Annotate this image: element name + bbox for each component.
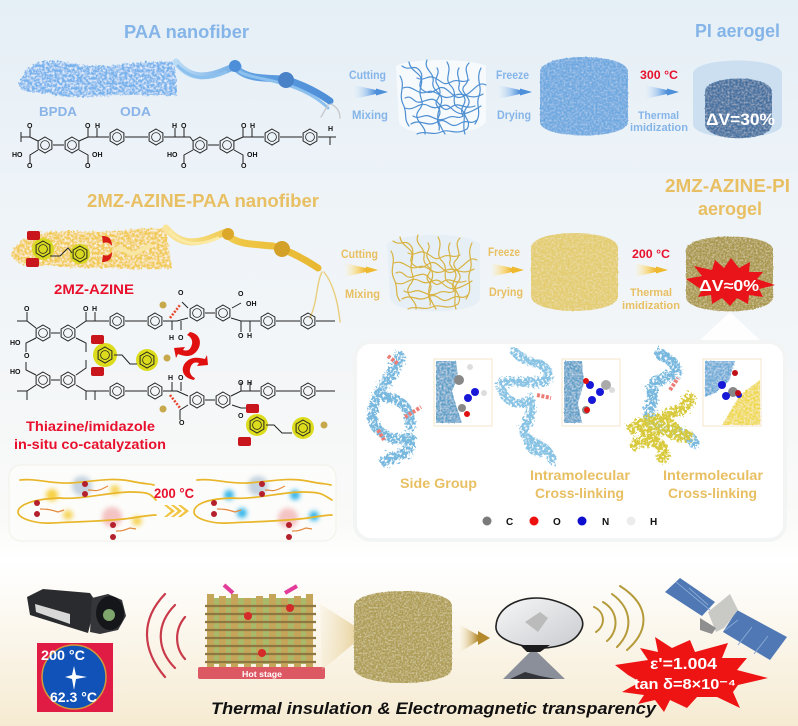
- icon: satellite: [665, 578, 787, 660]
- scaffold on hot stage: [198, 585, 325, 679]
- chemical structure: crosslinked chains: [10, 290, 335, 427]
- label: 200 C scheme: 200 °C: [154, 486, 194, 501]
- label: outside temperature: 200 °C: [41, 648, 85, 663]
- chemical structure: PAA: O: [241, 163, 247, 170]
- label: side group: Side Group: [400, 475, 477, 491]
- chemical structure: crosslinked chains: O: [83, 306, 89, 313]
- arrow: cutting gold: [344, 263, 378, 277]
- section: 2MZ-AZINE route: [10, 176, 790, 452]
- label: thermal imidization gold: [622, 287, 680, 312]
- callout: delta V 0: [686, 258, 775, 306]
- chemical structure: PAA: O: [85, 123, 91, 130]
- label: thiazine imidazole: [14, 418, 166, 452]
- highlight: callout beam to panel: [698, 312, 762, 342]
- chemical structure: crosslinked chains: O: [179, 420, 185, 427]
- cylinder: PI aerogel with shrinkage: [693, 60, 782, 138]
- cylinder: gold freeze-dried aerogel: [531, 233, 618, 311]
- process labels: freeze drying gold: [488, 247, 523, 299]
- process labels: freeze drying: Freeze: [496, 70, 529, 82]
- molecule: side group: [372, 356, 411, 462]
- chemical structure: PAA: O: [27, 123, 33, 130]
- label: thiazine imidazole: in-situ co-catalyzation: [14, 436, 166, 452]
- chemical structure: crosslinked chains: H: [247, 333, 252, 340]
- legend: atoms: H: [650, 517, 657, 528]
- heading: 2MZ-AZINE-PI aerogel: 2MZ-AZINE-PI: [665, 176, 790, 196]
- inset: side group: [434, 359, 492, 426]
- process labels: cutting mixing gold: Mixing: [345, 289, 380, 301]
- icon: red radiation arcs: [147, 594, 185, 677]
- cylinder: final aerogel: [354, 591, 452, 683]
- thermal image: [37, 643, 113, 712]
- fibers: after heating: [194, 479, 332, 523]
- chemical structure: PAA: H: [328, 126, 333, 133]
- fiber mat: gold: [11, 228, 172, 269]
- panel: catalysis scheme: [9, 465, 336, 541]
- process labels: cutting mixing: Mixing: [352, 110, 388, 122]
- heading: 2MZ-AZINE-PI aerogel: aerogel: [698, 199, 762, 219]
- label: thermal imidization: Thermal: [638, 110, 679, 122]
- chemical structure: PAA: O: [85, 163, 91, 170]
- chemical structure: crosslinked chains: O: [178, 290, 184, 297]
- process labels: freeze drying: Drying: [497, 110, 531, 122]
- label: intramolecular cross-linking: Cross-linking: [535, 485, 624, 501]
- chemical structure: PAA: [12, 123, 336, 170]
- label: intramolecular cross-linking: Intramolecular: [530, 467, 631, 483]
- label: permittivity: ε'=1.004: [650, 656, 717, 673]
- section: applications: [27, 578, 787, 718]
- legend: atoms: C: [506, 517, 513, 528]
- inset: intramolecular: [562, 359, 620, 426]
- chemical structure: crosslinked chains: H: [168, 375, 173, 382]
- fibers: before heating: [18, 479, 156, 523]
- labels: BPDA ODA: [39, 104, 152, 119]
- process labels: freeze drying: [496, 70, 531, 122]
- chemical structure: crosslinked chains: HO: [10, 340, 21, 347]
- heading: 2MZ-AZINE-PI aerogel: [665, 176, 790, 219]
- chemical structure: crosslinked chains: O: [238, 413, 244, 420]
- chemical structure: PAA: OH: [92, 152, 102, 159]
- heading: thermal insulation and electromagnetic transparency: Thermal insulation & Electromagnetic transparency: [211, 699, 658, 718]
- label: thiazine imidazole: Thiazine/imidazole: [26, 418, 155, 434]
- heading: PI aerogel: PI aerogel: [695, 21, 780, 41]
- chemical structure: PAA: O: [27, 163, 33, 170]
- chemical structure: crosslinked chains: HO: [10, 369, 21, 376]
- label: thermal imidization gold: Thermal: [630, 287, 672, 299]
- chemical structure: crosslinked chains: H: [247, 380, 252, 387]
- label: thermal imidization: [630, 110, 688, 134]
- label: intermolecular cross-linking: Intermolecular: [663, 467, 764, 483]
- label: loss tangent: tan δ=8×10⁻⁴: [634, 677, 736, 693]
- label: delta V 30: ΔV=30%: [706, 110, 775, 129]
- process labels: cutting mixing: Cutting: [349, 70, 386, 82]
- chemical structure: crosslinked chains: O: [178, 375, 184, 382]
- icon: chevron arrows: [164, 505, 189, 517]
- label: hot stage: Hot stage: [242, 670, 283, 679]
- labels: BPDA ODA: BPDA: [39, 104, 78, 119]
- cylinder: blue freeze-dried aerogel: [540, 57, 628, 136]
- cup: fiber network: [396, 60, 486, 134]
- label: thermal imidization: imidization: [630, 122, 688, 134]
- icon: infrared camera: [27, 589, 126, 634]
- section: PAA nanofiber route: [12, 21, 782, 170]
- inset: intermolecular: [703, 359, 761, 426]
- arrow: thermal imidization gold: [634, 263, 668, 277]
- chemical structure: crosslinked chains: OH: [246, 301, 256, 308]
- label: 2MZ-AZINE: 2MZ-AZINE: [54, 281, 134, 297]
- label: 300 C: 300 °C: [640, 68, 678, 82]
- chemical structure: crosslinked chains: H: [169, 335, 174, 342]
- molecules: crosslinkers: [34, 481, 292, 540]
- process labels: freeze drying gold: Drying: [489, 287, 523, 299]
- chemical structure: PAA: H: [250, 123, 255, 130]
- label: intramolecular cross-linking: [530, 467, 631, 501]
- azine molecule on mat: [26, 231, 152, 267]
- arrow: cutting: [354, 85, 388, 99]
- linkers: tails: [40, 486, 312, 531]
- process labels: cutting mixing gold: Cutting: [341, 249, 378, 261]
- process labels: cutting mixing gold: [341, 249, 380, 301]
- arrow: to dish: [460, 625, 490, 652]
- arrow: freeze drying: [498, 85, 532, 99]
- molecule: side group highlights: [378, 356, 421, 440]
- chemical structure: crosslinked chains: H: [92, 306, 97, 313]
- legend: atoms: [482, 516, 657, 528]
- legend: atoms: O: [553, 517, 561, 528]
- label: 200 C: 200 °C: [632, 247, 670, 261]
- label: thermal imidization gold: imidization: [622, 300, 680, 312]
- chemical structure: crosslinked chains: O: [24, 306, 30, 313]
- chemical structure: PAA: HO: [12, 152, 23, 159]
- label: intermolecular cross-linking: [663, 467, 764, 501]
- icon: red curved arrows: [174, 332, 208, 380]
- arrow: freeze drying gold: [490, 263, 524, 277]
- cup: gold fiber network: [387, 235, 480, 312]
- panel: molecular simulation: [355, 342, 785, 540]
- molecule: intermolecular yellow: [632, 398, 690, 458]
- cylinder: 2MZ-AZINE-PI aerogel: [686, 236, 773, 311]
- icon: gold signal arcs: [594, 586, 643, 650]
- molecule: intramolecular highlight: [537, 395, 551, 398]
- process labels: cutting mixing: [349, 70, 388, 122]
- chemical structure: crosslinked chains: O: [238, 333, 244, 340]
- azine crosslinker highlights: [91, 302, 328, 446]
- fiber mat: [19, 61, 177, 97]
- chemical structure: PAA: HO: [167, 152, 178, 159]
- callout: delta V 0: ΔV≈0%: [699, 278, 759, 295]
- nanofiber strand: [176, 60, 340, 118]
- labels: BPDA ODA: ODA: [120, 104, 152, 119]
- label: intermolecular cross-linking: Cross-linking: [668, 485, 757, 501]
- glows: reactive sites: [46, 476, 319, 528]
- chemical structure: PAA: O: [181, 163, 187, 170]
- label: inside temperature: 62.3 °C: [50, 690, 97, 705]
- heading: PAA nanofiber: PAA nanofiber: [124, 22, 249, 42]
- chemical structure: crosslinked chains: O: [238, 291, 244, 298]
- callout: dielectric values: [615, 637, 768, 712]
- chemical structure: crosslinked chains: O: [24, 353, 30, 360]
- legend: atoms: N: [602, 517, 609, 528]
- chemical structure: PAA: H: [172, 123, 177, 130]
- chemical structure: crosslinked chains: O: [238, 380, 244, 387]
- molecule: intramolecular: [502, 352, 552, 460]
- chemical structure: PAA: O: [181, 123, 187, 130]
- beam: magnify: [320, 604, 358, 670]
- heading: 2MZ-AZINE-PAA nanofiber: 2MZ-AZINE-PAA nanofiber: [87, 191, 319, 211]
- chemical structure: PAA: H: [95, 123, 100, 130]
- icon: radar dish: [496, 598, 583, 679]
- process labels: freeze drying gold: Freeze: [488, 247, 520, 259]
- molecule: intermolecular highlight: [670, 378, 678, 390]
- nanofiber strand: gold: [166, 228, 340, 322]
- arrow: thermal imidization: [645, 85, 679, 99]
- chemical structure: PAA: O: [241, 123, 247, 130]
- chemical structure: crosslinked chains: O: [178, 335, 184, 342]
- molecule: intermolecular blue: [648, 354, 693, 442]
- chemical structure: PAA: OH: [247, 152, 258, 159]
